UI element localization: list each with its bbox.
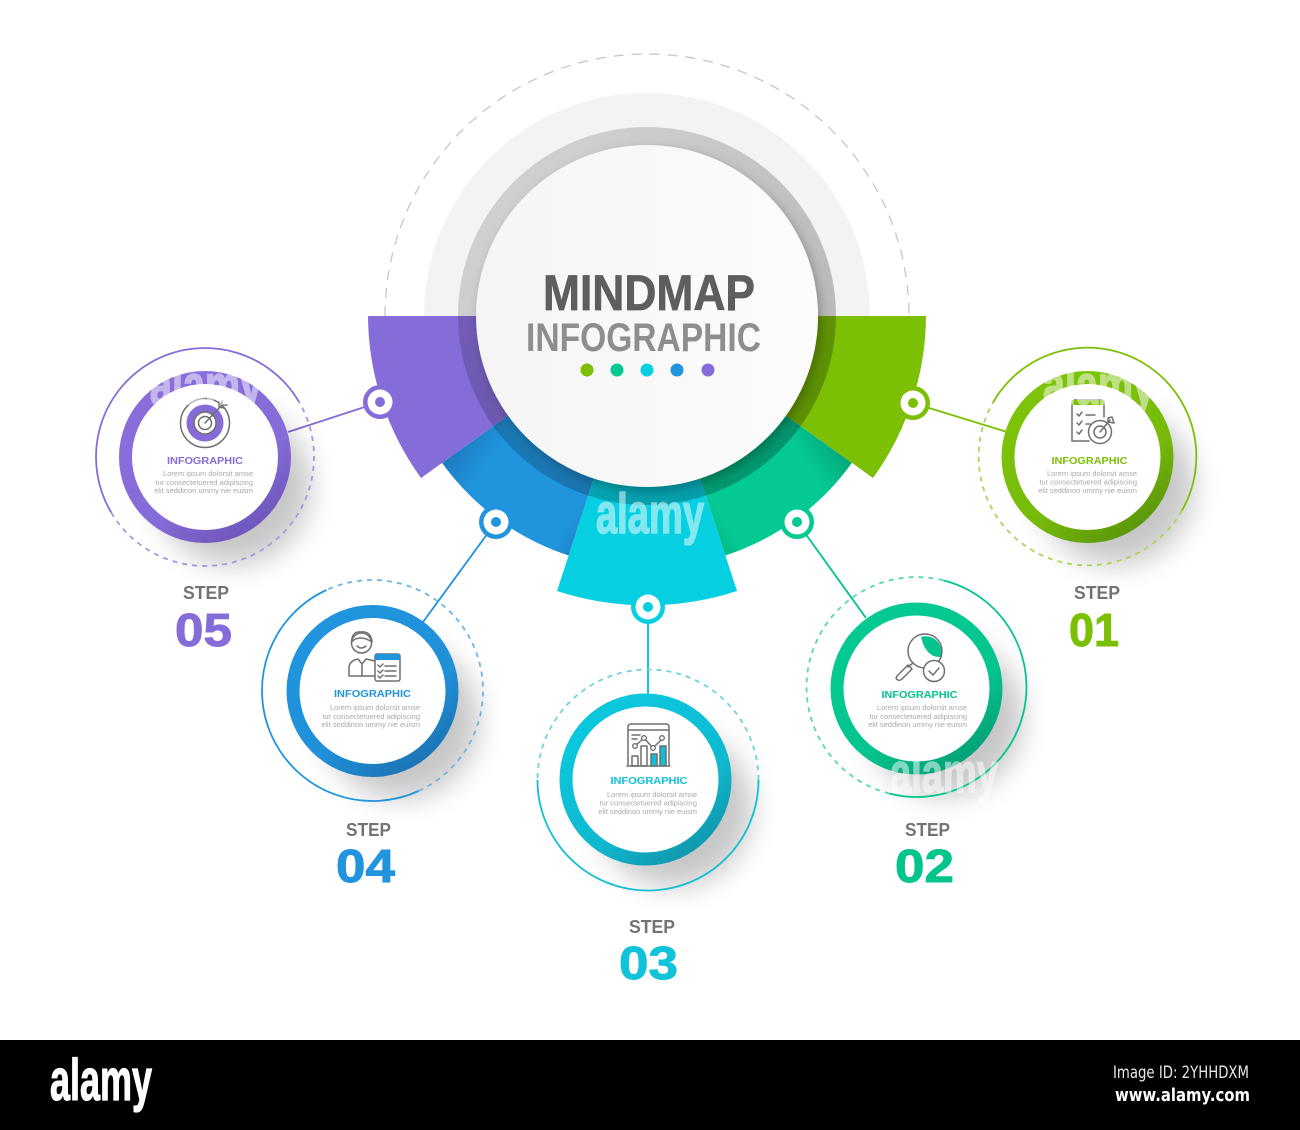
panel: step 05 <box>96 348 314 656</box>
image id: Image ID: 2YHHDXM <box>1113 1063 1249 1083</box>
watermark: alamy <box>1043 353 1155 416</box>
card text: elit seddinon ummy nie euism <box>321 720 420 729</box>
node markers <box>363 385 930 624</box>
card text <box>598 790 697 816</box>
step number: 01 <box>1069 604 1119 656</box>
card text: tur consectetuered adipiscing <box>322 712 420 721</box>
step label: STEP <box>1074 583 1120 603</box>
card text: tur consectetuered adipiscing <box>869 712 967 721</box>
card text <box>321 703 420 729</box>
hub shaded ring <box>458 127 836 505</box>
card text: Lorem ipsum dolorsit amse <box>607 790 697 799</box>
icon: analytics browser window <box>627 724 670 766</box>
panel: step 03 <box>538 670 758 989</box>
panel: step 02 <box>807 577 1026 892</box>
fan segment: step 03 <box>557 316 737 605</box>
panel: step 01 <box>979 348 1196 656</box>
fan segment: step 04 <box>442 316 647 556</box>
card text: Lorem ipsum dolorsit amse <box>1047 469 1137 478</box>
colour dots <box>580 364 714 376</box>
hub subtitle: INFOGRAPHIC <box>526 316 761 360</box>
card text <box>154 469 253 495</box>
fan segment: step 05 <box>368 316 647 478</box>
card text: tur consectetuered adipiscing <box>599 798 697 808</box>
footer bar <box>0 1040 1300 1130</box>
card text: elit seddinon ummy nie euism <box>598 807 697 816</box>
card text: elit seddinon ummy nie euism <box>1038 486 1137 495</box>
watermark: alamy <box>890 741 998 804</box>
icon: magnifier with check <box>896 634 944 682</box>
card text: Lorem ipsum dolorsit amse <box>163 469 253 478</box>
watermark: alamy <box>150 353 262 416</box>
card heading: INFOGRAPHIC <box>610 775 688 787</box>
step label: STEP <box>183 583 229 603</box>
card heading: INFOGRAPHIC <box>167 455 243 467</box>
card text: elit seddinon ummy nie euism <box>868 720 967 729</box>
card text: Lorem ipsum dolorsit amse <box>877 703 967 712</box>
light halo ring behind hub <box>424 93 870 316</box>
hub title: MINDMAP <box>543 265 755 321</box>
card text: tur consectetuered adipiscing <box>1039 478 1137 486</box>
icon: checklist with target <box>1072 400 1114 444</box>
website: www.alamy.com <box>1115 1085 1250 1106</box>
icon: target <box>180 398 230 448</box>
dashed arc above hub <box>385 54 909 316</box>
fan segment: step 02 <box>647 316 852 556</box>
fan segments <box>368 316 926 605</box>
step number: 03 <box>619 937 678 989</box>
icon: person with checklist <box>349 632 400 681</box>
step number: 04 <box>336 840 395 892</box>
card text: tur consectetuered adipiscing <box>155 478 253 487</box>
step label: STEP <box>346 820 391 840</box>
watermark on fan: alamy <box>596 482 704 546</box>
card heading: INFOGRAPHIC <box>334 688 411 700</box>
card text: elit seddinon ummy nie euism <box>154 486 253 495</box>
card heading: INFOGRAPHIC <box>882 689 958 701</box>
step label: STEP <box>629 917 675 937</box>
central hub circle <box>476 145 818 487</box>
footer logo: alamy <box>50 1048 152 1113</box>
step label: STEP <box>905 820 950 840</box>
card text: Lorem ipsum dolorsit amse <box>330 703 420 712</box>
panel: step 04 <box>262 580 483 892</box>
card text <box>868 703 967 729</box>
step number: 02 <box>895 840 954 892</box>
card text <box>1038 469 1137 495</box>
card heading: INFOGRAPHIC <box>1052 455 1128 467</box>
step number: 05 <box>175 604 232 656</box>
fan segment: step 01 <box>647 316 926 478</box>
connector lines <box>288 402 1007 694</box>
